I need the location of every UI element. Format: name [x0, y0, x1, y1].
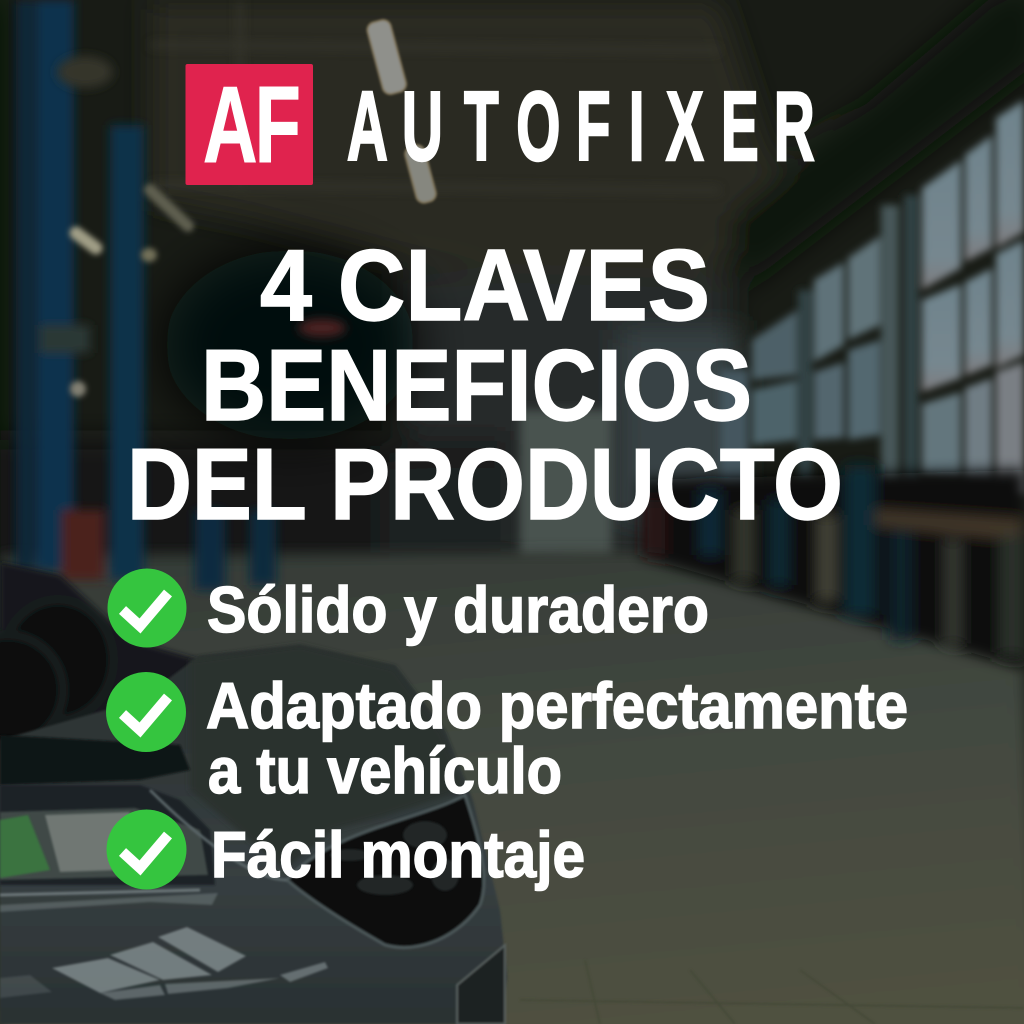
floor tile lines	[520, 960, 1024, 1024]
wordmark: AUTOFIXER	[347, 71, 815, 181]
tires, left	[0, 562, 200, 750]
blue lift columns	[16, 0, 276, 590]
title: DEL PRODUCTO	[127, 429, 843, 541]
ceiling beams	[150, 0, 720, 190]
open hood	[190, 645, 465, 870]
item: easy mounting: Fácil montaje	[211, 818, 585, 891]
ceiling lights	[57, 18, 438, 397]
grille	[287, 795, 484, 948]
item: fit: Adaptado perfectamente	[206, 669, 908, 742]
title: 4 CLAVES	[260, 230, 710, 342]
hood reflections	[0, 893, 328, 1000]
item: solid: Sólido y duradero	[207, 573, 709, 646]
air vent	[457, 945, 505, 1024]
floor	[0, 552, 1024, 1024]
back wall opening	[520, 410, 612, 558]
title	[127, 230, 843, 541]
windows	[720, 100, 1024, 495]
dark pocket	[165, 250, 415, 440]
item: easy mounting	[106, 810, 585, 891]
item: fit: a tu vehículo	[208, 734, 562, 807]
headlight	[0, 808, 208, 880]
item: fit	[106, 669, 908, 807]
logo badge: AF	[203, 64, 298, 186]
car front	[0, 645, 507, 1024]
title: BENEFICIOS	[201, 330, 752, 442]
benefit list	[106, 568, 908, 891]
right side shelves	[640, 465, 1024, 668]
logo	[186, 64, 815, 186]
